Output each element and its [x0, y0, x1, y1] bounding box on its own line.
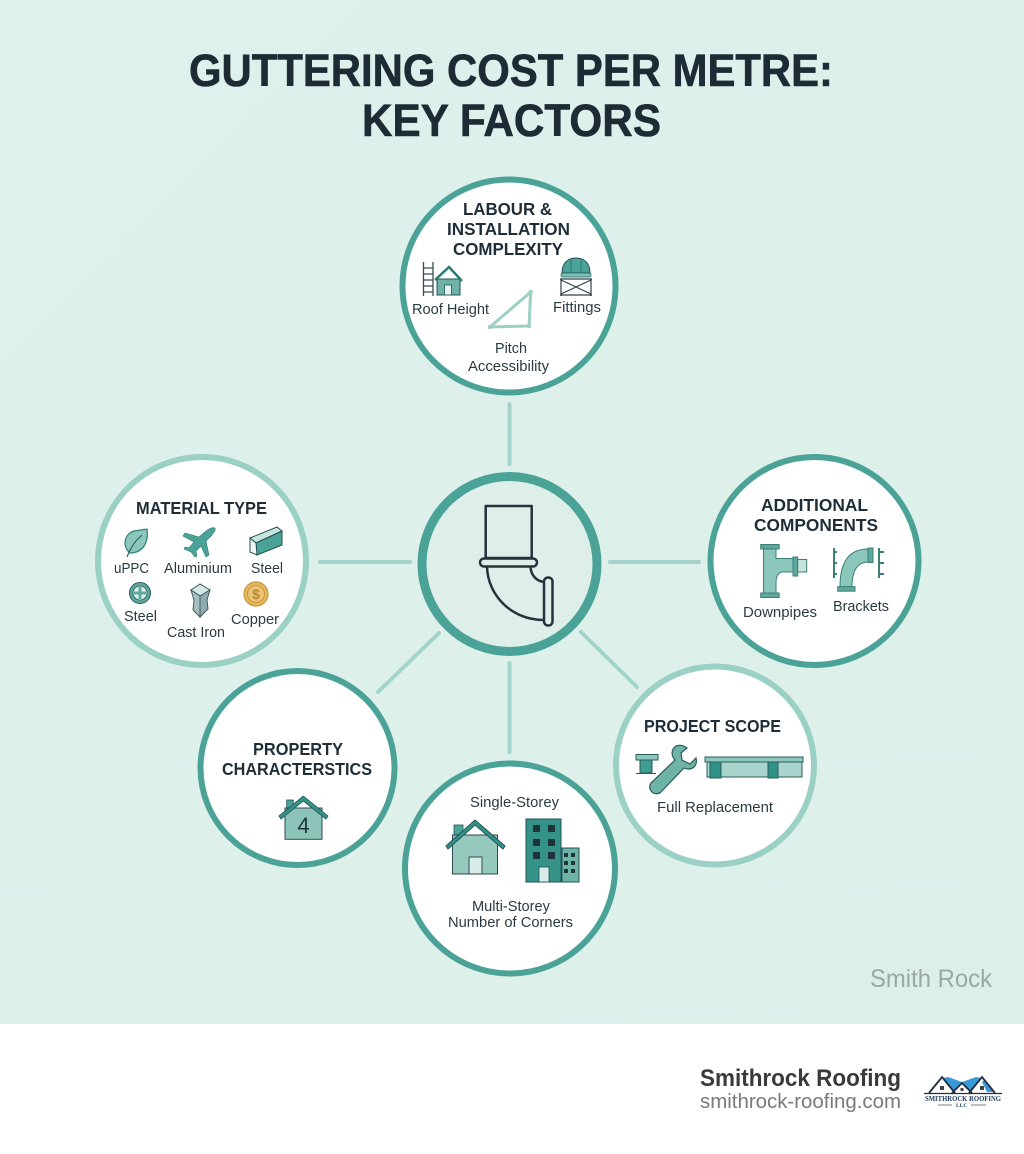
panel: labour and installation complexity: [402, 180, 616, 392]
label: steel second: Steel: [124, 608, 157, 625]
icon: aeroplane: [183, 528, 215, 557]
icon: downpipe elbow: [480, 506, 552, 626]
label: multi-storey: Multi-Storey: [472, 898, 550, 915]
heading: labour: COMPLEXITY: [453, 239, 563, 259]
heading: labour: [447, 199, 570, 259]
label: cast iron: Cast Iron: [167, 624, 225, 641]
icon: ladder and house: [424, 262, 462, 296]
label: roof height: Roof Height: [412, 301, 490, 318]
icon: house with number: [279, 796, 328, 839]
label: number of corners: Number of Corners: [448, 914, 573, 931]
icon: downpipe junction: [761, 544, 807, 598]
icon: bracket elbow: [834, 548, 884, 591]
icon: steel box section: [250, 527, 282, 555]
title: GUTTERING COST PER METRE:: [189, 45, 833, 96]
footer brand text: [700, 1065, 901, 1113]
panel: project scope: [616, 666, 814, 864]
heading: property characteristics: PROPERTY: [253, 739, 343, 759]
icon: copper coin: $: [252, 586, 260, 602]
label: downpipes: Downpipes: [743, 604, 817, 621]
panel: additional components: [710, 457, 918, 665]
icon: roof pitch triangle: [488, 290, 532, 329]
heading: project scope: PROJECT SCOPE: [644, 716, 781, 736]
heading: labour: LABOUR &: [463, 199, 552, 219]
icon: copper coin: [244, 582, 268, 606]
heading: additional components: COMPONENTS: [754, 515, 878, 535]
title: [189, 45, 833, 146]
panel: storeys and corners: [405, 764, 615, 974]
title: KEY FACTORS: [362, 95, 661, 146]
icon: house with number: 4: [297, 813, 310, 838]
footer logo: SMITHROCK ROOFING: [925, 1094, 1001, 1103]
label: brackets: Brackets: [833, 598, 889, 615]
label: single-storey: Single-Storey: [470, 794, 559, 811]
heading: additional components: [754, 495, 878, 535]
label: accessibility: Accessibility: [468, 358, 549, 375]
label: steel: Steel: [251, 560, 283, 577]
icon: steel disc: [130, 582, 150, 604]
icon: multi-storey building: [526, 819, 579, 882]
icon: wrench: [650, 745, 696, 794]
label: copper: Copper: [231, 611, 279, 628]
label: full replacement: Full Replacement: [657, 799, 774, 816]
icon: cast iron block: [191, 584, 210, 617]
icon: long gutter beam: [705, 757, 803, 778]
heading: additional components: ADDITIONAL: [761, 495, 868, 515]
icon: small beam: [636, 754, 658, 774]
footer brand text: smithrock-roofing.com: [700, 1090, 901, 1113]
connector lines: [320, 404, 699, 752]
panel: property characteristics: [200, 671, 394, 865]
footer logo: LLC: [956, 1103, 967, 1109]
icon: helmet and scaffold: [560, 258, 592, 296]
heading: material type: MATERIAL TYPE: [136, 498, 267, 518]
heading: property characteristics: [222, 739, 372, 779]
label: pitch: Pitch: [495, 340, 527, 357]
icon: house: [446, 820, 505, 874]
footer logo: [924, 1077, 1002, 1109]
footer brand text: Smithrock Roofing: [700, 1065, 901, 1092]
label: fittings: Fittings: [553, 299, 601, 316]
watermark: Smith Rock: [870, 965, 992, 993]
central hub: gutter pipe: [422, 476, 597, 652]
footer band: [0, 1024, 1024, 1154]
heading: labour: INSTALLATION: [447, 219, 570, 239]
label: aluminium: Aluminium: [164, 560, 232, 577]
heading: property characteristics: CHARACTERSTICS: [222, 759, 372, 779]
label: uPPC: uPPC: [114, 560, 149, 577]
panel: material type: [98, 457, 306, 665]
icon: leaf: [125, 529, 147, 557]
